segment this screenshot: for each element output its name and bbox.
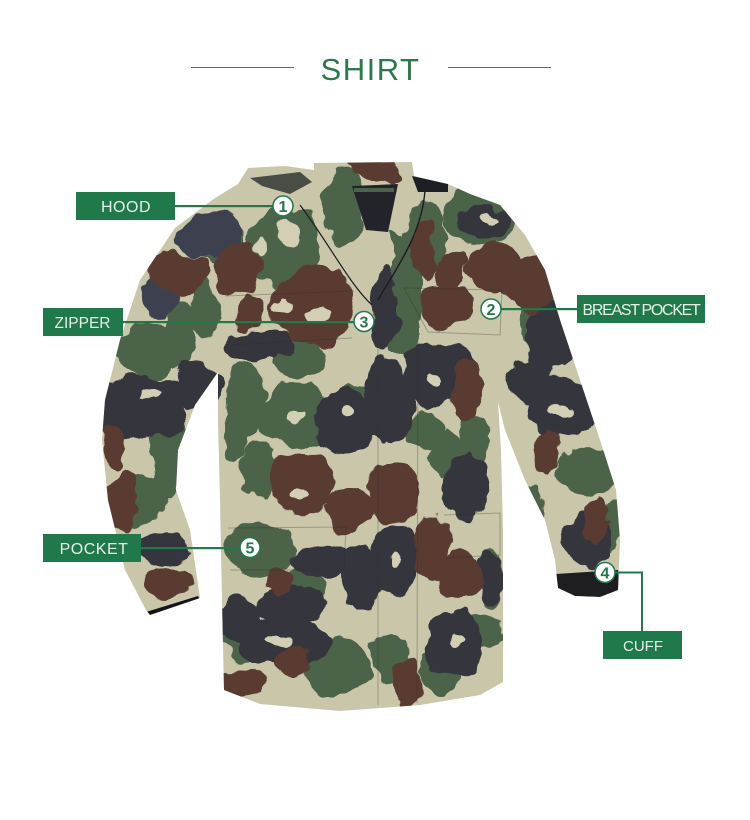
label: pocket: 5 [246, 540, 255, 558]
label: pocket: POCKET [60, 541, 128, 558]
label: breast pocket: 2 [487, 302, 496, 319]
title: SHIRT [321, 52, 420, 87]
label: hood [76, 192, 293, 220]
label: hood: HOOD [101, 199, 151, 216]
label: zipper: 3 [360, 314, 369, 332]
label: cuff: CUFF [623, 638, 663, 655]
label: hood: 1 [279, 199, 288, 216]
placket and pocket flaps [225, 288, 502, 705]
label: pocket [43, 534, 260, 562]
camouflage pattern [102, 163, 618, 700]
sleeve cuff [556, 570, 620, 597]
jacket photo illustration [90, 150, 630, 720]
label: cuff: 4 [601, 566, 610, 582]
label: breast pocket [481, 295, 705, 323]
label: zipper [43, 308, 374, 336]
label: zipper: ZIPPER [55, 315, 110, 332]
collar and cord [250, 172, 448, 305]
label: cuff [595, 562, 682, 659]
label: breast pocket: BREAST POCKET [582, 302, 701, 319]
